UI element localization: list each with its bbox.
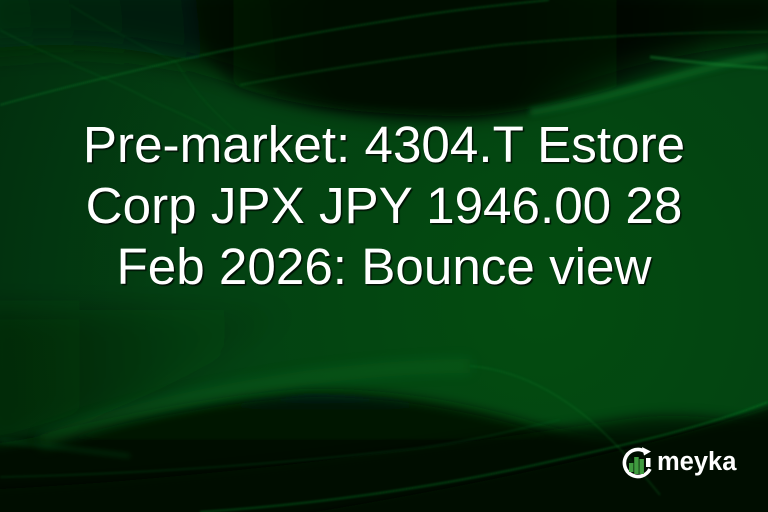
icon: meyka ring with bars [622, 447, 652, 478]
title: Corp JPX JPY 1946.00 28 [86, 177, 682, 234]
title: Pre-market: 4304.T Estore [83, 116, 685, 173]
logo: meyka [622, 447, 737, 478]
title [83, 116, 685, 295]
title: Feb 2026: Bounce view [116, 238, 651, 295]
wordmark: meyka [657, 448, 736, 476]
